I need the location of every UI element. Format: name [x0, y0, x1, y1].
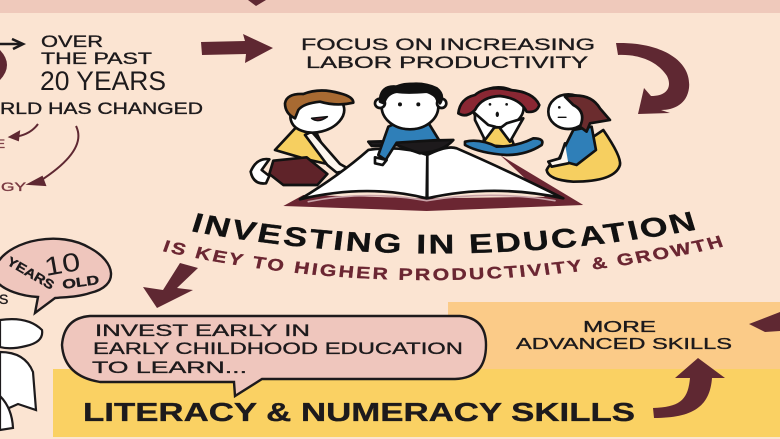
- arrow: down-left maroon: [143, 263, 198, 308]
- arrow: curved maroon: [616, 43, 689, 114]
- speech bubble: invest early: EARLY CHILDHOOD EDUCATION: [93, 339, 463, 358]
- text: more advanced skills: [516, 319, 732, 353]
- speech bubble: invest early: INVEST EARLY IN: [95, 321, 310, 340]
- heading: over the past 20 years: 20 YEARS: [40, 66, 166, 96]
- subheading: key to higher productivity: IS KEY TO HIGHER PRODUCTIVITY & GROWTH: [163, 236, 723, 280]
- heading: investing in education: INVESTING IN EDUCATION: [192, 212, 696, 254]
- heading: over the past 20 years: OVER: [41, 32, 103, 51]
- child 2: blue shirt: [368, 84, 453, 165]
- heading: literacy and numeracy skills: LITERACY & NUMERACY SKILLS: [83, 397, 635, 427]
- cropped maroon circle: [0, 50, 7, 80]
- speech bubble: 10 years old: 10: [42, 246, 82, 282]
- child 1: brown hair: [251, 89, 353, 185]
- text: more advanced skills: ADVANCED SKILLS: [516, 336, 732, 353]
- text: world has changed: RLD HAS CHANGED: [0, 99, 203, 118]
- child 3: red hair: [458, 87, 542, 155]
- heading: over the past 20 years: THE PAST: [41, 49, 152, 68]
- arrow: cropped top right: [749, 312, 780, 332]
- heading: over the past 20 years: [40, 32, 166, 96]
- speech bubble: invest early: [62, 316, 486, 396]
- left arrow to over the past: [0, 39, 23, 49]
- heading: focus on increasing labor productivity: [301, 35, 595, 72]
- small curved arrows: [10, 124, 78, 185]
- cropped labels: [0, 137, 26, 194]
- speech bubble: invest early: TO LEARN...: [92, 358, 247, 377]
- book: [283, 147, 583, 211]
- top banner strip: [0, 0, 780, 13]
- heading: focus on increasing labor productivity: FOCUS ON INCREASING: [301, 35, 595, 54]
- panel: more advanced skills: [448, 302, 780, 369]
- illustration: children reading a big book: [251, 84, 620, 211]
- text: more advanced skills: MORE: [583, 319, 656, 336]
- child 4: yellow dress: [547, 94, 620, 182]
- cropped person sketch: [0, 319, 42, 430]
- speech bubble: 10 years old: [0, 239, 111, 313]
- arrow: right to focus: [201, 34, 273, 63]
- arrow: curved up maroon: [653, 358, 725, 418]
- cropped labels: GY: [1, 180, 26, 194]
- panel: literacy and numeracy: [53, 369, 780, 437]
- heading: focus on increasing labor productivity: LABOR PRODUCTIVITY: [306, 53, 588, 72]
- speech bubble: 10 years old: YEARS: [4, 254, 57, 293]
- speech bubble: 10 years old: OLD: [61, 272, 100, 292]
